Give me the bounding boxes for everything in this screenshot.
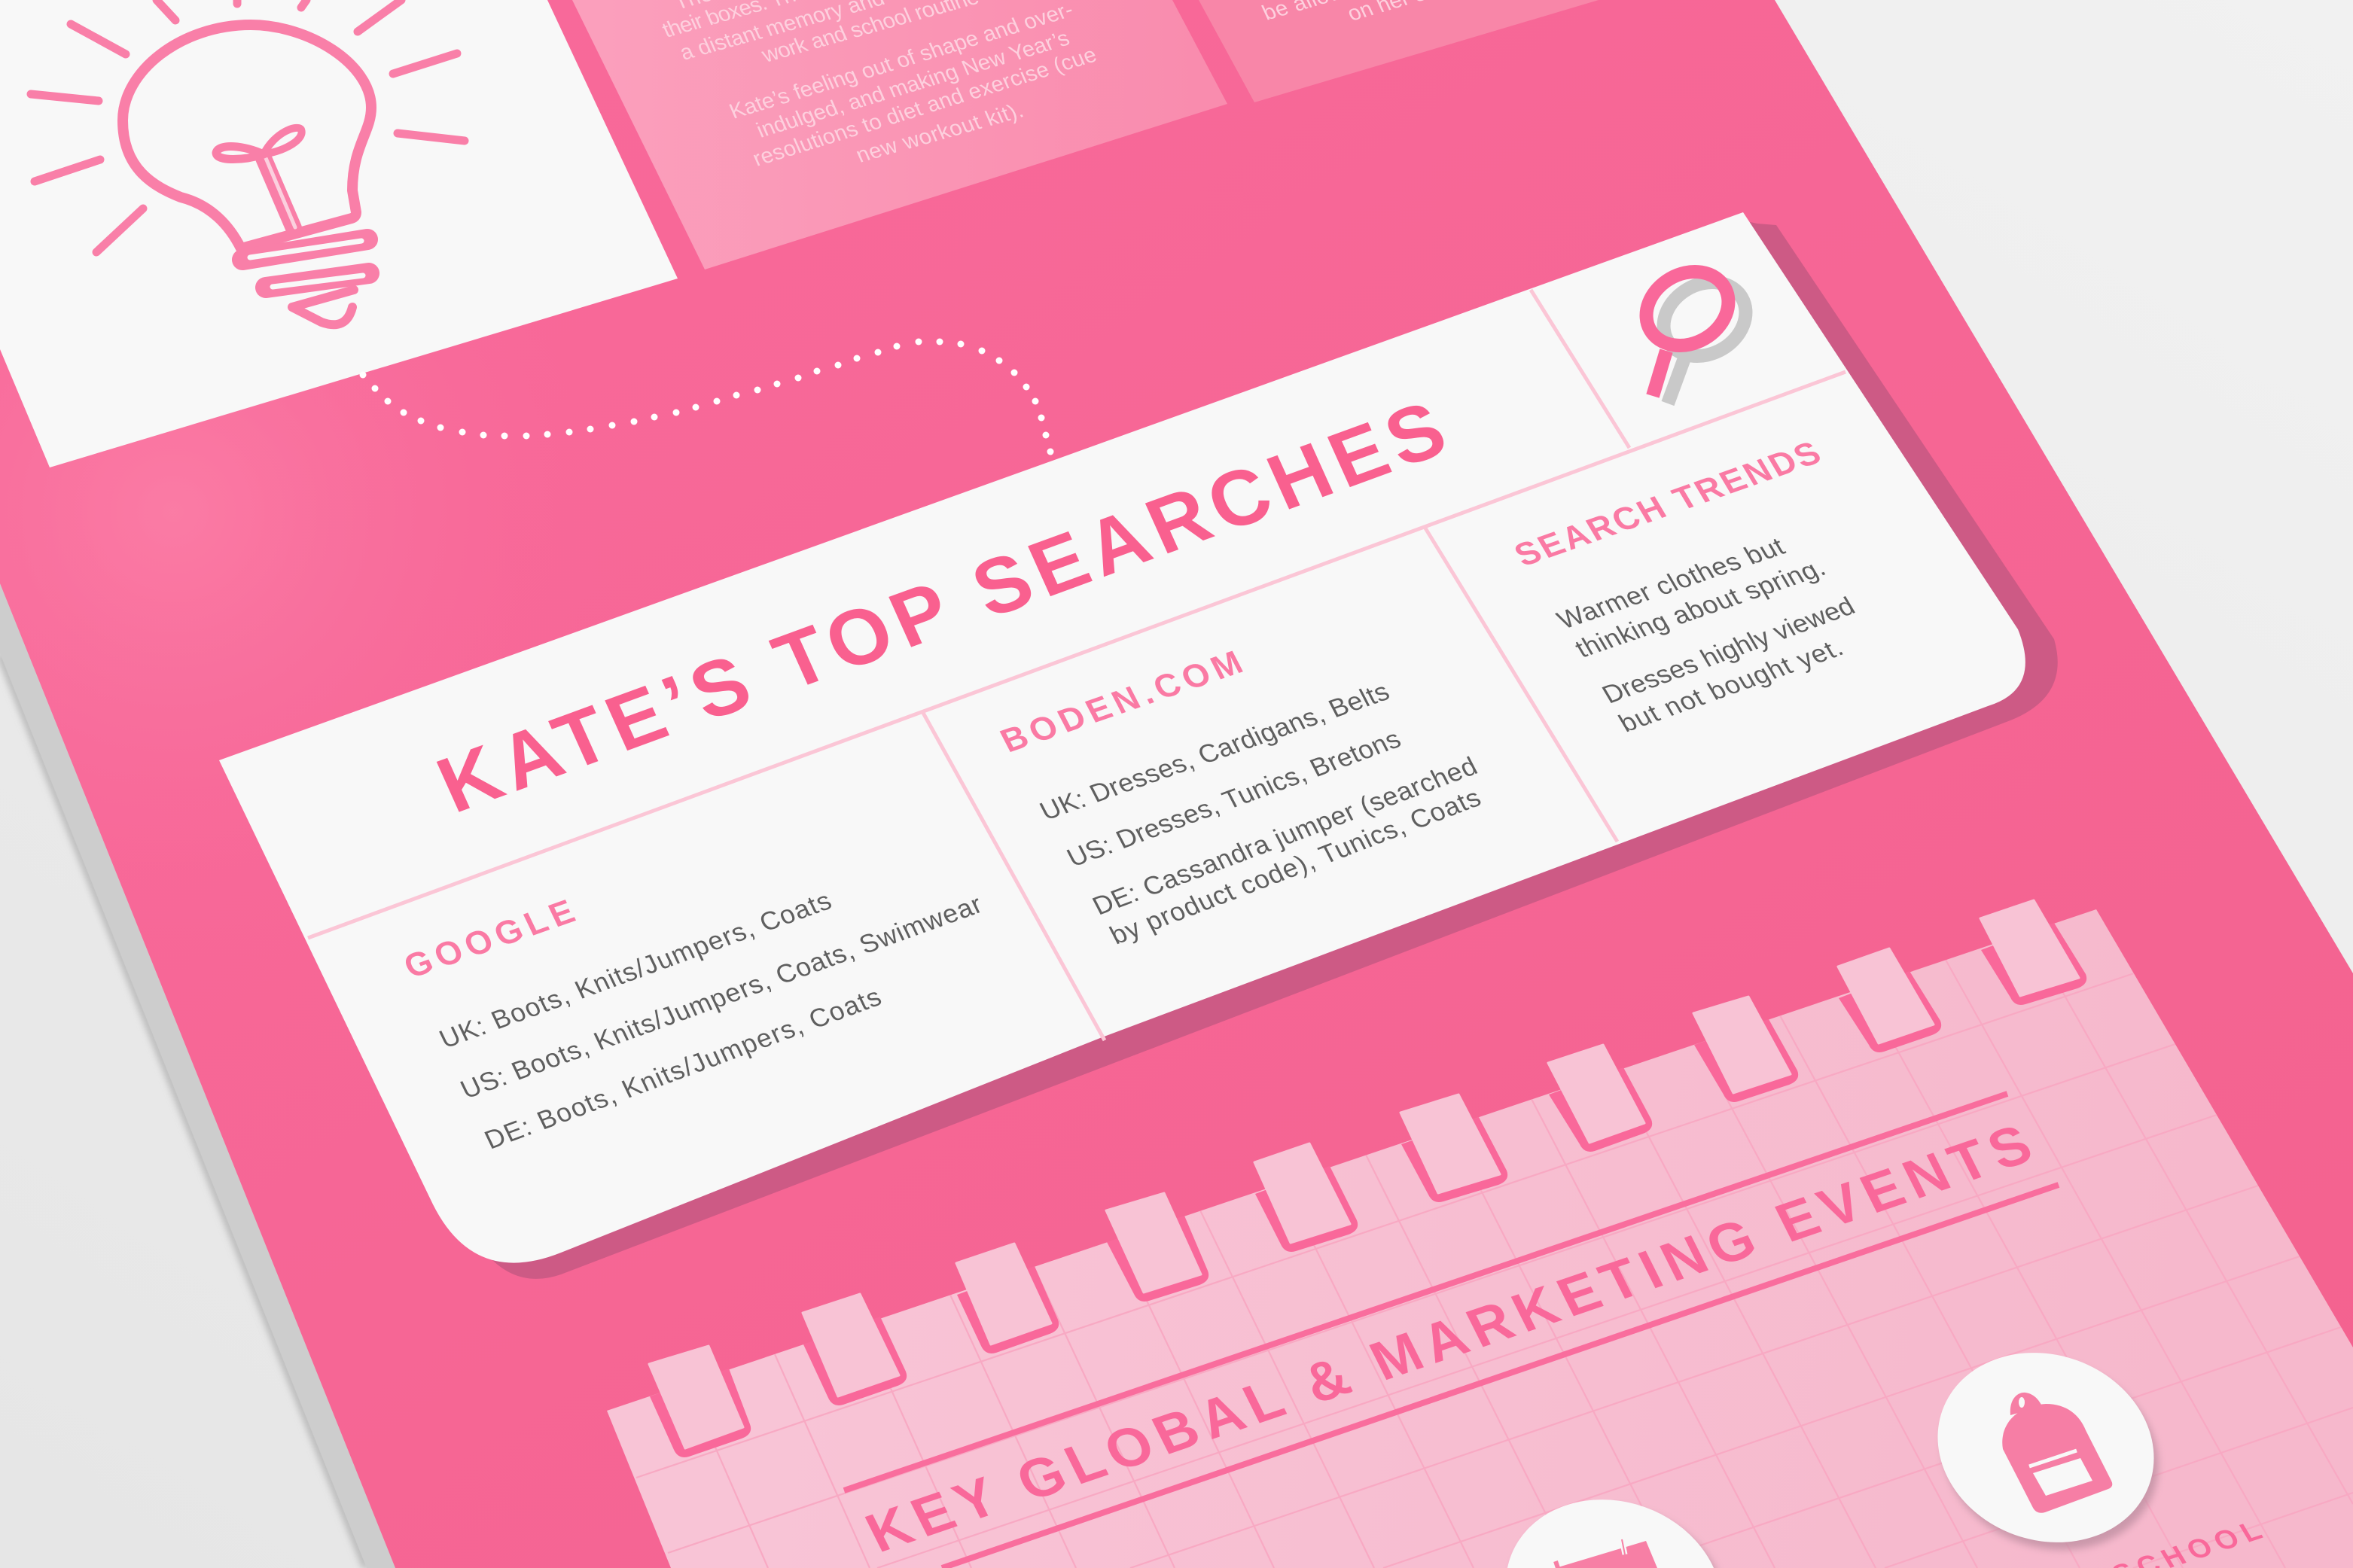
column: Google: UK: Boots, Knits/Jumpers, Coats (435, 886, 836, 1054)
column: Boden.com: DE: Cassandra jumper (searched (1088, 752, 1482, 921)
icon: backpack badge (1911, 1323, 2185, 1568)
panel: light bulb (0, 0, 678, 467)
paper edge thickness (0, 583, 395, 1568)
column: Google: GOOGLE (398, 892, 581, 985)
panel: New Year text (572, 0, 1227, 269)
panel: second text box (1199, 0, 1599, 102)
column: Boden.com: US: Dresses, Tunics, Bretons (1062, 724, 1406, 872)
panel: New Year text: new workout kit). (852, 99, 1027, 167)
heading: Kate's top searches: KATE’S TOP SEARCHES (425, 385, 1458, 830)
column: Boden.com: UK: Dresses, Cardigans, Belts (1035, 677, 1394, 826)
column: Search trends: Dresses highly viewed (1597, 592, 1860, 709)
icon: light bulb (31, 0, 465, 324)
column: Search trends: Warmer clothes but (1552, 532, 1790, 635)
column: Boden.com (994, 644, 1486, 950)
dotted connector (360, 339, 1054, 455)
notebook tabs (649, 900, 2079, 1448)
column: Boden.com: BODEN.COM (994, 644, 1248, 760)
column: Google: US: Boots, Knits/Jumpers, Coats, Swimwear (456, 890, 987, 1104)
column: Google: DE: Boots, Knits/Jumpers, Coats (480, 982, 886, 1155)
panel: Kate's top searches card (219, 212, 2025, 1263)
column: Search trends: SEARCH TRENDS (1507, 434, 1827, 574)
panel: New Year text: indulged, and making New Year’s (753, 26, 1073, 142)
column: Search trends: thinking about spring. (1570, 553, 1830, 663)
column: Search trends (1507, 434, 1860, 738)
panel: New Year text: resolutions to diet and exercise (cue (749, 43, 1100, 171)
card shadow (489, 218, 2058, 1279)
notebook binding holes (650, 923, 2086, 1457)
icon: calendar badge (1507, 1499, 1718, 1568)
icon: magnifying glass (1633, 257, 1759, 403)
panel: key global and marketing events notebook (607, 900, 2353, 1568)
column: Boden.com: by product code), Tunics, Coats (1105, 783, 1486, 950)
panel: New Year text: Kate’s feeling out of shape and over- (726, 0, 1077, 123)
column: Search trends: but not bought yet. (1614, 633, 1849, 738)
heading: key global and marketing events: KEY GLOBAL & MARKETING EVENTS (856, 1113, 2041, 1563)
